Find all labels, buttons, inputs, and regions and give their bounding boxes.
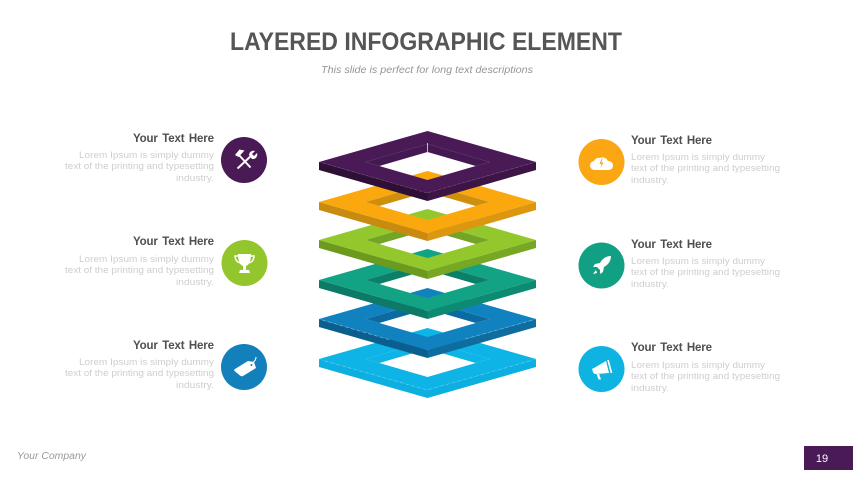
icon: rocket (578, 242, 624, 288)
description: Lorem Ipsum is simply dummy (631, 256, 766, 266)
description: text of the printing and typesetting (631, 163, 780, 173)
description: industry. (631, 383, 669, 393)
page number badge (804, 446, 853, 470)
description (65, 357, 215, 390)
layer: green (319, 209, 536, 279)
description (631, 256, 780, 289)
title: LAYERED INFOGRAPHIC ELEMENT (230, 28, 622, 56)
description (631, 360, 780, 393)
layer: cyan (319, 328, 536, 398)
description: Lorem Ipsum is simply dummy (631, 360, 766, 370)
item: left 2 trophy (65, 236, 268, 287)
heading: Your Text Here (631, 239, 712, 251)
layer: purple (319, 131, 536, 201)
icon: megaphone (578, 346, 624, 392)
description: text of the printing and typesetting (65, 265, 214, 275)
description: Lorem Ipsum is simply dummy (79, 357, 215, 367)
icon: hammer and wrench (221, 137, 267, 183)
icon: price tag (221, 344, 267, 390)
item: left 3 tag (65, 340, 267, 390)
page number badge: 19 (816, 453, 828, 465)
description (65, 150, 215, 183)
footer company name: Your Company (17, 451, 87, 462)
layered stack diagram (319, 131, 536, 398)
heading: Your Text Here (631, 342, 712, 354)
description: text of the printing and typesetting (65, 368, 214, 378)
icon: trophy (222, 240, 268, 286)
item: left 1 tools (65, 133, 267, 183)
description: Lorem Ipsum is simply dummy (79, 254, 215, 264)
heading: Your Text Here (133, 133, 214, 145)
description: industry. (176, 277, 214, 287)
item: right 2 rocket (578, 239, 780, 289)
description: text of the printing and typesetting (631, 267, 780, 277)
layer: teal (319, 249, 536, 319)
item: right 1 cloud (578, 135, 780, 185)
description: industry. (631, 175, 669, 185)
description: industry. (176, 380, 214, 390)
description: text of the printing and typesetting (65, 161, 214, 171)
icon: cloud with bolt (578, 139, 624, 185)
layer: blue (319, 288, 536, 358)
description: industry. (631, 279, 669, 289)
heading: Your Text Here (631, 135, 712, 147)
description (631, 152, 780, 185)
description (65, 254, 215, 287)
description: Lorem Ipsum is simply dummy (79, 150, 215, 160)
description: industry. (176, 173, 214, 183)
layer: orange (319, 171, 536, 241)
heading: Your Text Here (133, 340, 214, 352)
heading: Your Text Here (133, 236, 214, 248)
description: Lorem Ipsum is simply dummy (631, 152, 766, 162)
item: right 3 megaphone (578, 342, 780, 393)
subtitle: This slide is perfect for long text descriptions (321, 64, 534, 76)
description: text of the printing and typesetting (631, 371, 780, 381)
